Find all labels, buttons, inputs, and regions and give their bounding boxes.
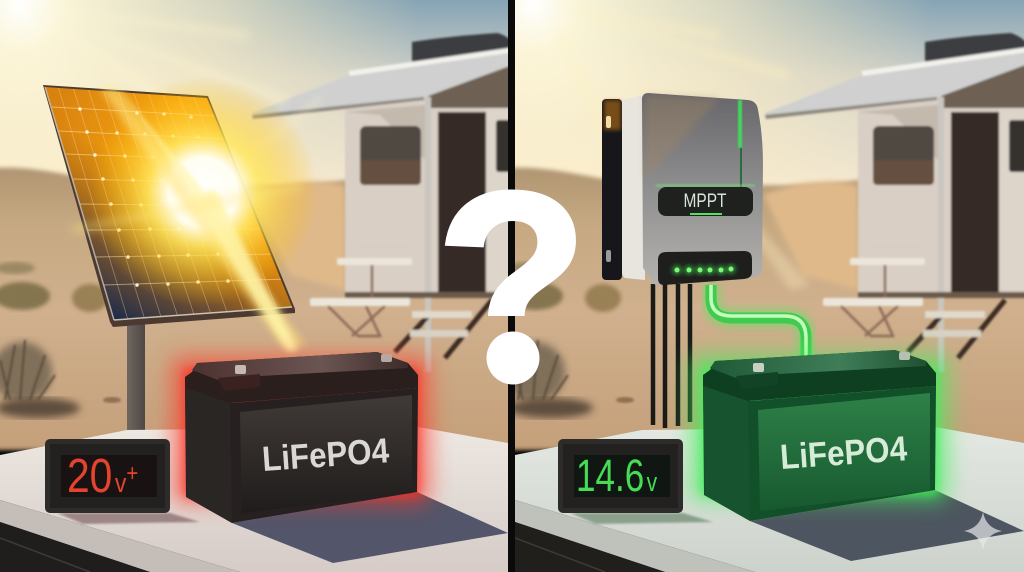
icon: sparkle bbox=[964, 512, 1002, 550]
battery label: LiFePO4 bbox=[261, 431, 391, 479]
voltmeter right bbox=[558, 439, 683, 513]
battery left bbox=[185, 352, 418, 523]
sun glare on panel bbox=[88, 77, 318, 307]
MPPT label: MPPT bbox=[684, 191, 727, 212]
battery shadow bbox=[750, 490, 1024, 561]
icon: solar panel bbox=[43, 77, 318, 352]
voltage reading: 20v bbox=[67, 450, 126, 503]
battery label: LiFePO4 bbox=[779, 429, 909, 477]
meter shadow bbox=[57, 513, 200, 524]
desert and camper scene bbox=[0, 0, 520, 450]
table top bbox=[0, 427, 508, 572]
meter shadow bbox=[570, 513, 713, 524]
voltage reading: + bbox=[126, 459, 138, 486]
panel: left without controller bbox=[0, 0, 520, 572]
divider bbox=[508, 0, 515, 572]
panel post bbox=[127, 318, 145, 430]
question mark bbox=[444, 190, 576, 384]
desert and camper scene bbox=[515, 0, 1024, 454]
battery right bbox=[703, 350, 936, 521]
mounting cables bbox=[653, 284, 690, 428]
voltmeter left bbox=[45, 439, 170, 513]
panel: right with MPPT bbox=[515, 0, 1024, 572]
battery shadow bbox=[232, 492, 508, 563]
battery glow red bbox=[170, 355, 432, 505]
sun rays bbox=[707, 32, 808, 290]
green cable bbox=[711, 285, 806, 358]
voltage reading: 14.6v bbox=[576, 450, 658, 501]
sun rays bbox=[219, 30, 317, 115]
LED plate bbox=[658, 251, 752, 285]
question mark: ? bbox=[436, 140, 588, 419]
table top bbox=[515, 427, 1024, 572]
battery glow green bbox=[688, 353, 950, 503]
icon: MPPT controller bbox=[602, 93, 763, 285]
